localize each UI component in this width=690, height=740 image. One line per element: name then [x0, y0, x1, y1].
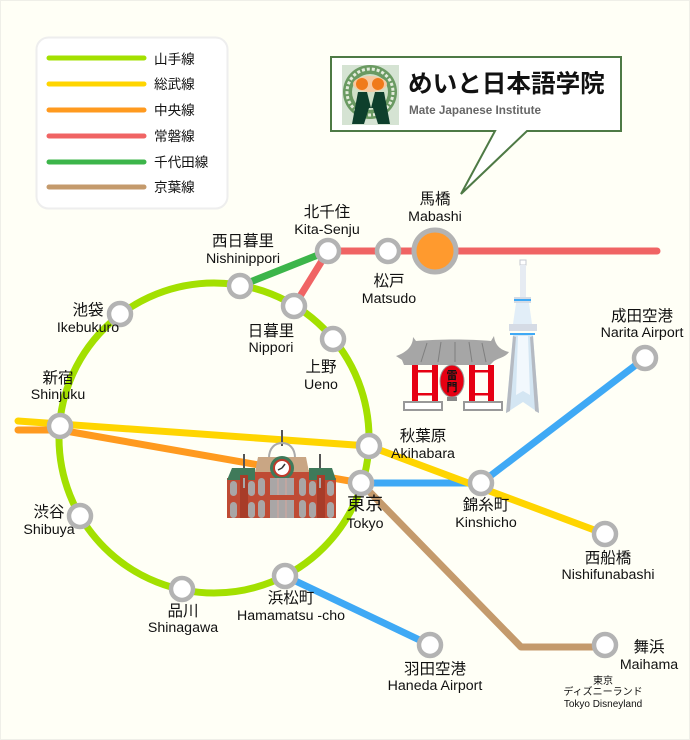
label: Nishinippori — [206, 232, 280, 267]
line: Chuo — [18, 430, 361, 483]
icon: lantern: 雷 — [446, 369, 458, 382]
station: Matsudo — [377, 240, 399, 262]
label: Kita-Senju: 北千住 — [304, 203, 350, 221]
line: Chiyoda — [240, 251, 328, 286]
station: Ikebukuro — [109, 303, 131, 325]
label: Matsudo: 松戸 — [373, 272, 405, 290]
station: Kinshicho — [470, 472, 492, 494]
label: Ikebukuro: Ikebukuro — [57, 320, 119, 336]
label: Matsudo: Matsudo — [362, 291, 416, 307]
legend panel — [36, 38, 228, 208]
label: Mabashi: 馬橋 — [419, 190, 451, 208]
label: Maihama: 舞浜 — [633, 638, 665, 656]
station: Nishinippori — [229, 275, 251, 297]
label: Haneda Airport: Haneda Airport — [388, 678, 482, 694]
station labels — [23, 190, 683, 710]
station: Kita-Senju — [317, 240, 339, 262]
label: Ueno — [304, 358, 338, 393]
label: Shibuya — [23, 503, 75, 538]
legend: Joban line: 常磐線 — [154, 129, 195, 144]
line: Sobu — [18, 421, 605, 534]
label: Akihabara: 秋葉原 — [400, 427, 446, 445]
legend: Yamanote line: 山手線 — [154, 52, 195, 67]
legend: Keiyo line: 京葉線 — [154, 180, 195, 195]
label: Mabashi — [408, 190, 462, 225]
legend: Chuo line: 中央線 — [154, 103, 195, 118]
station: Maihama — [594, 634, 616, 656]
station: Akihabara — [358, 435, 380, 457]
label: Kinshicho — [455, 496, 517, 531]
label: Haneda Airport: 羽田空港 — [404, 660, 466, 678]
label: Tokyo Disneyland: 東京 — [593, 674, 613, 687]
label: Tokyo Disneyland: ディズニーランド — [563, 685, 643, 698]
school name Japanese: めいと日本語学院 — [408, 70, 605, 98]
stations — [49, 230, 656, 656]
line: Hamamatsucho to Haneda — [285, 576, 430, 645]
station: Tokyo — [350, 472, 372, 494]
label: Nippori: Nippori — [249, 340, 293, 356]
label: Shinjuku — [31, 369, 85, 403]
label: Tokyo Disneyland: Tokyo Disneyland — [564, 699, 642, 710]
line: Yamanote loop — [59, 283, 369, 593]
label: Tokyo — [346, 494, 384, 532]
label: Nishifunabashi: 西船橋 — [585, 549, 632, 567]
label: Tokyo: Tokyo — [346, 516, 384, 532]
label: Ueno: Ueno — [304, 377, 338, 393]
icon: lantern: 門 — [446, 381, 458, 394]
label: Narita Airport — [601, 307, 683, 341]
station: Shinjuku — [49, 415, 71, 437]
label: Hamamatsucho: Hamamatsu -cho — [237, 608, 345, 624]
label: Nishinippori: 西日暮里 — [212, 232, 274, 250]
label: Kita-Senju — [294, 203, 360, 238]
label: Nishifunabashi: Nishifunabashi — [561, 567, 655, 583]
rail lines — [18, 251, 657, 647]
label: Shinagawa: Shinagawa — [148, 620, 218, 636]
legend: Sobu line: 総武線 — [154, 77, 195, 92]
label: Kinshicho: 錦糸町 — [463, 496, 509, 514]
station: Nishifunabashi — [594, 523, 616, 545]
label: Nishifunabashi — [561, 549, 655, 583]
label: Matsudo — [362, 272, 416, 307]
legend: Chiyoda line: 千代田線 — [154, 155, 209, 170]
station: Shinagawa — [171, 578, 193, 600]
label: Shinagawa — [148, 603, 218, 636]
illustration: Kaminarimon gate — [396, 336, 509, 410]
station: Shibuya — [69, 505, 91, 527]
station: Ueno — [322, 328, 344, 350]
line: Tokyo to Kinshicho — [361, 480, 481, 486]
label: Tokyo Disneyland — [563, 674, 643, 710]
label: Ikebukuro — [57, 301, 119, 336]
school name English: Mate Japanese Institute — [409, 103, 541, 117]
label: Shibuya: Shibuya — [23, 522, 75, 538]
label: Ikebukuro: 池袋 — [72, 301, 104, 319]
icon: lantern — [440, 365, 464, 401]
label: Hamamatsucho: 浜松町 — [268, 589, 314, 607]
station: Nippori — [283, 295, 305, 317]
line: Kinshicho to Narita — [481, 358, 645, 483]
label: Shibuya: 渋谷 — [33, 503, 65, 521]
icon: school logo — [342, 65, 399, 125]
label: Maihama: Maihama — [620, 657, 678, 673]
station: Narita Airport — [634, 347, 656, 369]
label: Shinjuku: Shinjuku — [31, 387, 85, 403]
label: Akihabara: Akihabara — [391, 446, 455, 462]
illustration: Tokyo Station — [227, 430, 336, 518]
label: Narita Airport: Narita Airport — [601, 325, 683, 341]
label: Ueno: 上野 — [305, 358, 337, 376]
station: Hamamatsucho — [274, 565, 296, 587]
label: Kinshicho: Kinshicho — [455, 515, 517, 531]
callout: school name — [331, 57, 621, 194]
label: Maihama — [620, 638, 678, 673]
label: Shinjuku: 新宿 — [42, 369, 74, 387]
label: Nishinippori: Nishinippori — [206, 251, 280, 267]
label: Nippori: 日暮里 — [248, 322, 294, 340]
label: Tokyo: 東京 — [347, 494, 383, 514]
label: Hamamatsucho — [237, 589, 345, 624]
label: Narita Airport: 成田空港 — [611, 307, 673, 325]
label: Akihabara — [391, 427, 455, 462]
illustration: Skytree — [506, 260, 539, 413]
label: Mabashi: Mabashi — [408, 209, 462, 225]
line: Keiyo — [361, 483, 605, 647]
label: Shinagawa: 品川 — [167, 603, 199, 620]
label: Kita-Senju: Kita-Senju — [294, 222, 360, 238]
station: Mabashi (highlight) — [414, 230, 456, 272]
line: Joban — [294, 251, 657, 306]
station: Haneda Airport — [419, 634, 441, 656]
label: Nippori — [248, 322, 294, 356]
label: Haneda Airport — [388, 660, 482, 694]
